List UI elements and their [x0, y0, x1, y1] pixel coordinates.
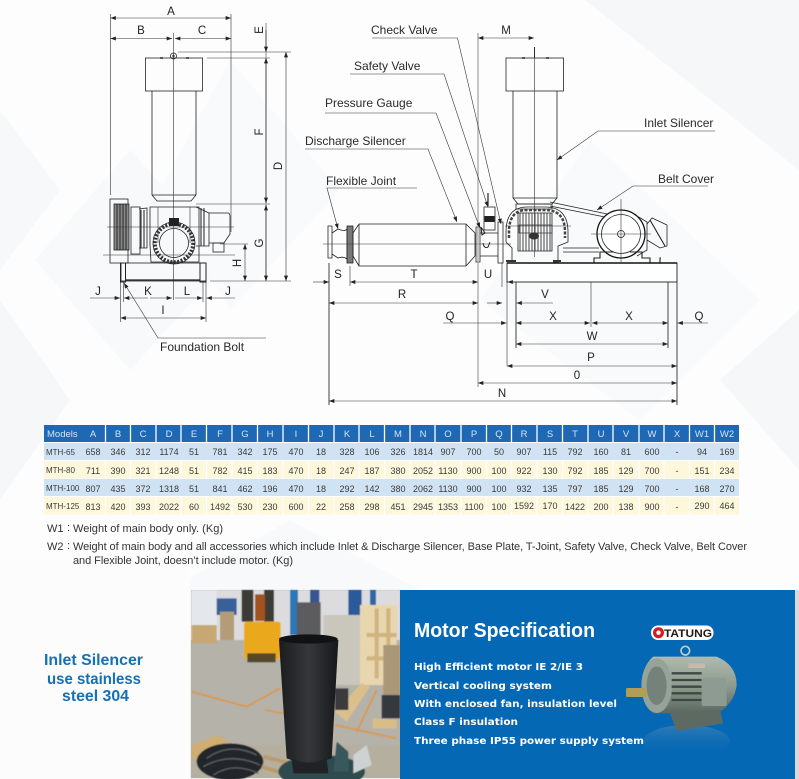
- specification table: [44, 425, 739, 514]
- table row MTH-80: 185: [593, 466, 609, 476]
- dimension lines and labels: C: [198, 25, 206, 37]
- table row MTH-80: 2052: [413, 466, 433, 476]
- table row MTH-80: MTH-80: [46, 466, 75, 475]
- table header row: V: [623, 429, 630, 440]
- table header row: C: [140, 429, 147, 440]
- table row MTH-100: 900: [466, 484, 482, 494]
- table row MTH-125: 2022: [159, 502, 179, 512]
- weight notes: :: [67, 522, 70, 534]
- table row MTH-100: 435: [110, 484, 126, 494]
- table header row: M: [394, 429, 402, 440]
- callout: safety valve: [350, 59, 488, 207]
- table row MTH-65: [46, 447, 735, 457]
- table row MTH-80: 470: [288, 466, 304, 476]
- table row MTH-100: 196: [262, 484, 278, 494]
- inlet silencer caption: Inlet Silencer: [44, 652, 143, 669]
- image: electric motor: [626, 646, 737, 758]
- table header row: R: [521, 429, 528, 440]
- dimension lines and labels: V: [541, 289, 549, 301]
- table row MTH-80: 711: [86, 466, 100, 476]
- table row MTH-65: -: [676, 447, 678, 457]
- table row MTH-125: 600: [288, 502, 304, 512]
- dimension lines and labels: L: [184, 286, 191, 298]
- weight notes: :: [67, 540, 70, 552]
- table row MTH-100: 18: [316, 484, 326, 494]
- table row MTH-65: 50: [494, 447, 504, 457]
- motor feature list: Three phase IP55 power supply system: [414, 736, 644, 747]
- base plate: [506, 261, 677, 282]
- table row MTH-80: 415: [237, 466, 253, 476]
- table row MTH-125: 290: [694, 501, 710, 511]
- table row MTH-100: 797: [567, 484, 583, 494]
- table row MTH-125: 451: [390, 502, 406, 512]
- table row MTH-100: MTH-100: [46, 484, 80, 493]
- table row MTH-100: 135: [542, 484, 558, 494]
- table row MTH-65: 792: [567, 447, 583, 457]
- callout: pressure gauge: Pressure Gauge: [325, 96, 413, 110]
- dimension lines and labels: [90, 6, 291, 322]
- table row MTH-80: -: [676, 466, 678, 476]
- table row MTH-80: 18: [316, 466, 326, 476]
- table row MTH-100: 185: [593, 484, 609, 494]
- table row MTH-100: 807: [85, 484, 101, 494]
- dimension lines and labels: X: [549, 311, 557, 323]
- table row MTH-100: 380: [390, 484, 406, 494]
- callout: flexible joint: [326, 174, 417, 229]
- table row MTH-100: 932: [516, 484, 532, 494]
- table row MTH-65: 18: [316, 447, 326, 457]
- table header row: F: [217, 429, 223, 440]
- table row MTH-80: 390: [110, 466, 126, 476]
- dimension lines and labels: W: [587, 331, 598, 343]
- table row MTH-65: 907: [516, 447, 532, 457]
- weight notes: Weight of main body and all accessories which include Inlet & Discharge Silencer, Base Plate, T-Joint, Safety Valve, Check Valve, Belt Cover: [73, 541, 747, 553]
- callout: check valve: Check Valve: [371, 23, 438, 37]
- table row MTH-80: 321: [135, 466, 151, 476]
- table header row: L: [369, 429, 375, 440]
- table header row: P: [471, 429, 477, 440]
- belt cover and motor: [550, 199, 667, 263]
- table row MTH-80: 183: [262, 466, 278, 476]
- table row MTH-100: 100: [491, 484, 507, 494]
- heading: motor specification: Motor Specification: [414, 620, 595, 642]
- dimension lines and labels: T: [410, 269, 418, 281]
- dimension lines and labels: 0: [574, 370, 580, 382]
- dimension lines and labels: U: [484, 269, 492, 281]
- table row MTH-65: 328: [339, 447, 355, 457]
- table row MTH-65: 1174: [159, 447, 179, 457]
- blower side: [505, 47, 571, 262]
- table row MTH-80: 234: [719, 466, 735, 476]
- table row MTH-125: -: [676, 502, 678, 512]
- table row MTH-65: 326: [390, 447, 406, 457]
- dimension lines and labels: H: [232, 259, 244, 267]
- table row MTH-65: 470: [288, 447, 304, 457]
- motor feature list: Class F insulation: [414, 717, 518, 728]
- table header row: I: [295, 429, 297, 440]
- dimension lines and labels: X: [625, 311, 633, 323]
- callout: safety valve: Safety Valve: [354, 59, 421, 73]
- table header row: K: [344, 429, 351, 440]
- callout: belt cover: Belt Cover: [658, 172, 714, 186]
- table row MTH-80: 1130: [438, 466, 458, 476]
- photo: stainless steel inlet silencer in warehouse: [191, 590, 400, 779]
- table row MTH-65: 175: [262, 447, 278, 457]
- table row MTH-80: 151: [694, 466, 710, 476]
- table row MTH-80: 1248: [159, 466, 179, 476]
- callout: inlet silencer: [557, 116, 715, 160]
- blower front: [107, 199, 234, 282]
- inlet silencer side: [506, 47, 564, 209]
- dimension lines and labels: R: [398, 289, 406, 301]
- table row MTH-125: 1492: [210, 502, 230, 512]
- dimension lines and labels: G: [254, 238, 266, 247]
- callout: check valve: [371, 23, 501, 224]
- dimension lines and labels: P: [587, 352, 595, 364]
- dimension lines and labels: M: [501, 25, 511, 37]
- motor feature list: High Efficient motor IE 2/IE 3: [414, 662, 583, 673]
- callout: pressure gauge: [325, 96, 480, 228]
- callout: discharge silencer: [305, 134, 457, 222]
- table header row: T: [572, 429, 578, 440]
- table row MTH-100: 129: [618, 484, 634, 494]
- table row MTH-125: 100: [491, 502, 507, 512]
- table header row: W: [648, 429, 657, 440]
- table header row: J: [319, 429, 324, 440]
- table row MTH-100: 462: [237, 484, 253, 494]
- table row MTH-65: 94: [697, 447, 707, 457]
- table header row: O: [444, 429, 452, 440]
- panel: motor specification: [400, 590, 799, 779]
- table row MTH-80: 900: [466, 466, 482, 476]
- table row MTH-125: 1422: [565, 502, 585, 512]
- table header row: N: [420, 429, 427, 440]
- table row MTH-65: 907: [440, 447, 456, 457]
- table row MTH-125: 2945: [413, 502, 433, 512]
- table row MTH-100: 2062: [413, 484, 433, 494]
- table row MTH-125: 170: [542, 501, 558, 511]
- motor feature list: With enclosed fan, insulation level: [414, 699, 617, 710]
- table row MTH-100: 168: [694, 484, 710, 494]
- inlet silencer caption: steel 304: [62, 688, 129, 705]
- table row MTH-125: 258: [339, 502, 355, 512]
- table row MTH-65: 160: [593, 447, 609, 457]
- table row MTH-80: 247: [339, 466, 355, 476]
- weight notes: W2: [47, 541, 64, 553]
- table row MTH-125: 393: [135, 502, 151, 512]
- dimension lines and labels: I: [161, 305, 165, 317]
- dimension lines and labels: Q: [695, 311, 704, 323]
- dimension lines and labels: D: [273, 162, 285, 170]
- table row MTH-125: 530: [237, 502, 253, 512]
- table row MTH-100: 372: [135, 484, 151, 494]
- table row MTH-80: 187: [364, 466, 380, 476]
- table row MTH-125: [46, 501, 735, 512]
- table row MTH-80: 380: [390, 466, 406, 476]
- table row MTH-100: 270: [719, 484, 735, 494]
- inlet silencer caption: use stainless: [47, 671, 141, 688]
- table header row: Models: [47, 429, 78, 440]
- inlet silencer caption: [44, 652, 143, 705]
- dimension lines and labels: E: [254, 26, 266, 34]
- table row MTH-100: 841: [212, 484, 228, 494]
- table header row: G: [241, 429, 249, 440]
- table row MTH-125: 298: [364, 502, 380, 512]
- table row MTH-65: 115: [543, 447, 557, 457]
- table row MTH-80: 51: [189, 466, 199, 476]
- table header row: A: [90, 429, 97, 440]
- dimension lines and labels: N: [498, 388, 506, 400]
- table header row: S: [547, 429, 553, 440]
- weight notes: [47, 522, 747, 567]
- side view drawing with dimensions: [305, 23, 715, 405]
- dimension lines and labels: J: [225, 286, 231, 298]
- table header row: W2: [720, 429, 734, 440]
- motor feature list: Vertical cooling system: [414, 681, 552, 692]
- table row MTH-80: 130: [542, 466, 558, 476]
- table row MTH-65: 658: [85, 447, 101, 457]
- table row MTH-125: 22: [316, 502, 326, 512]
- logo: tatung: [651, 626, 714, 640]
- table header row: E: [191, 429, 197, 440]
- table row MTH-65: MTH-65: [46, 448, 75, 457]
- table row MTH-65: 700: [466, 447, 482, 457]
- table row MTH-125: 60: [189, 502, 199, 512]
- table row MTH-65: 342: [237, 447, 253, 457]
- table row MTH-100: 1318: [159, 484, 179, 494]
- table row MTH-65: 106: [364, 447, 380, 457]
- table row MTH-125: 200: [593, 502, 609, 512]
- table row MTH-125: MTH-125: [46, 502, 80, 511]
- table row MTH-65: 600: [644, 447, 660, 457]
- table row MTH-65: 346: [110, 447, 126, 457]
- callout: discharge silencer: Discharge Silencer: [305, 134, 406, 148]
- discharge line: joint, silencer, t-pipe: [323, 193, 511, 266]
- inlet silencer front: [146, 53, 202, 201]
- table row MTH-125: 230: [262, 502, 278, 512]
- table header row: D: [166, 429, 173, 440]
- callout: flexible joint: Flexible Joint: [326, 174, 397, 188]
- callout: belt cover: [597, 172, 714, 210]
- table row MTH-125: 900: [644, 502, 660, 512]
- dimension lines and labels: B: [137, 25, 145, 37]
- table row MTH-125: 813: [85, 502, 101, 512]
- table header row: X: [674, 429, 681, 440]
- table row MTH-80: 700: [644, 466, 660, 476]
- table row MTH-125: 1353: [438, 502, 458, 512]
- table row MTH-80: 792: [567, 466, 583, 476]
- table row MTH-100: 700: [644, 484, 660, 494]
- table row MTH-80: 100: [491, 466, 507, 476]
- table row MTH-80: 129: [618, 466, 634, 476]
- table row MTH-125: 420: [110, 502, 126, 512]
- table row MTH-100: 470: [288, 484, 304, 494]
- table row MTH-125: 138: [618, 502, 634, 512]
- table row MTH-80: 922: [516, 466, 532, 476]
- dimension lines and labels: K: [144, 286, 152, 298]
- table row MTH-80: [46, 466, 735, 476]
- dimension lines and labels: Q: [446, 311, 455, 323]
- table header row: Q: [495, 429, 503, 440]
- label: foundation bolt: Foundation Bolt: [160, 340, 245, 354]
- dimension lines and labels: S: [334, 269, 342, 281]
- weight notes: W1: [47, 523, 64, 535]
- table row MTH-65: 781: [212, 447, 228, 457]
- table row MTH-100: 142: [364, 484, 380, 494]
- table row MTH-80: 782: [212, 466, 228, 476]
- table row MTH-125: 1100: [464, 502, 484, 512]
- table header row: B: [115, 429, 121, 440]
- callout: inlet silencer: Inlet Silencer: [644, 116, 713, 130]
- table header row: W1: [695, 429, 709, 440]
- table row MTH-100: -: [676, 484, 678, 494]
- weight notes: Weight of main body only. (Kg): [73, 523, 223, 535]
- weight notes: and Flexible Joint, doesn’t include motor. (Kg): [73, 555, 293, 567]
- table header row: U: [598, 429, 605, 440]
- table row MTH-100: 292: [339, 484, 355, 494]
- table header row: [47, 429, 734, 440]
- front view drawing with dimensions: [90, 6, 291, 354]
- table row MTH-100: 1130: [438, 484, 458, 494]
- table row MTH-65: 169: [719, 447, 735, 457]
- table row MTH-125: 1592: [514, 501, 534, 511]
- table row MTH-125: 464: [719, 501, 735, 511]
- table header row: H: [267, 429, 274, 440]
- table row MTH-65: 51: [189, 447, 199, 457]
- table row MTH-65: 1814: [413, 447, 433, 457]
- table row MTH-100: 51: [189, 484, 199, 494]
- logo: tatung: TATUNG: [664, 628, 712, 640]
- dimension lines and labels: J: [95, 286, 101, 298]
- label: foundation bolt: [124, 283, 266, 354]
- table row MTH-65: 81: [621, 447, 631, 457]
- table row MTH-65: 312: [135, 447, 151, 457]
- dimension lines and labels: A: [167, 6, 175, 18]
- dimension lines and labels: [313, 25, 708, 405]
- dimension lines and labels: F: [254, 128, 266, 136]
- motor feature list: [414, 662, 644, 747]
- table row MTH-100: [46, 484, 735, 494]
